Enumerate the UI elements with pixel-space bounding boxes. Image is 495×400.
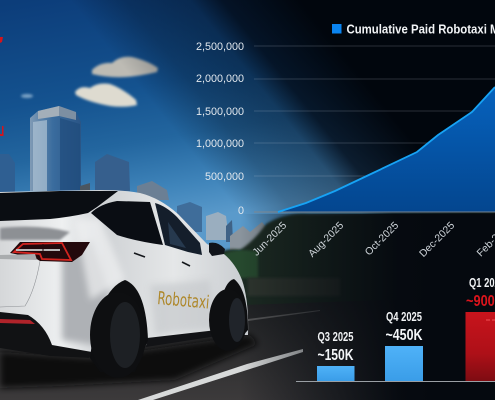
bar: Q4 2025 — [385, 310, 423, 381]
x-axis labels: Aug-2025 — [307, 220, 346, 260]
bar: Q3 2025: Q3 2025 — [318, 330, 354, 344]
data line — [278, 87, 495, 212]
tail light — [10, 242, 90, 262]
bar: Q4 2025: ~450K — [386, 327, 423, 344]
trunk seam — [0, 261, 40, 307]
clouds — [21, 57, 158, 107]
x-axis labels — [251, 220, 495, 260]
Robotaxi door text: Robotaxi — [157, 288, 210, 314]
bar chart: quarterly miles — [296, 276, 495, 382]
y-axis labels: 2,500,000 — [196, 41, 244, 53]
y-axis labels: 1,000,000 — [196, 138, 244, 150]
y-axis labels: 1,500,000 — [196, 106, 244, 118]
baseline — [254, 211, 495, 213]
road — [0, 296, 495, 400]
x-axis labels: Jun-2025 — [251, 220, 289, 258]
y-axis labels: 0 — [238, 205, 244, 217]
front wheel arch — [216, 279, 248, 350]
x-axis labels: Oct-2025 — [363, 220, 401, 258]
side window — [91, 201, 163, 245]
door handles — [134, 253, 145, 257]
trees and ground — [205, 214, 495, 330]
red cut-off marks at left edge — [0, 37, 4, 136]
bar: Q1 2026 — [466, 276, 495, 381]
bar: Q4 2025: Q4 2025 — [386, 310, 422, 324]
x-axis labels: Dec-2025 — [418, 220, 457, 260]
front window — [155, 203, 202, 255]
rear window — [0, 191, 118, 221]
y-axis labels: 500,000 — [205, 171, 244, 183]
right lower dark panel — [240, 214, 495, 400]
skyline buildings — [0, 106, 270, 250]
grid lines — [254, 46, 495, 176]
car shadow — [0, 335, 258, 388]
bar: Q3 2025 — [317, 330, 354, 381]
side mirror — [209, 243, 225, 256]
rear wheel — [90, 292, 146, 378]
y-axis labels — [196, 41, 244, 217]
car body — [0, 190, 248, 358]
car: white Robotaxi — [0, 190, 248, 378]
area fill — [278, 87, 495, 212]
bar chart axis — [296, 380, 495, 382]
y-axis labels: 2,000,000 — [196, 73, 244, 85]
rear wheel arch — [90, 280, 148, 372]
lane markings — [138, 310, 320, 400]
bar: Q3 2025: ~150K — [318, 347, 354, 364]
line chart: cumulative paid robotaxi miles — [196, 22, 495, 260]
front wheel — [209, 289, 247, 351]
rear bumper — [0, 312, 92, 358]
side skirt — [146, 330, 217, 347]
